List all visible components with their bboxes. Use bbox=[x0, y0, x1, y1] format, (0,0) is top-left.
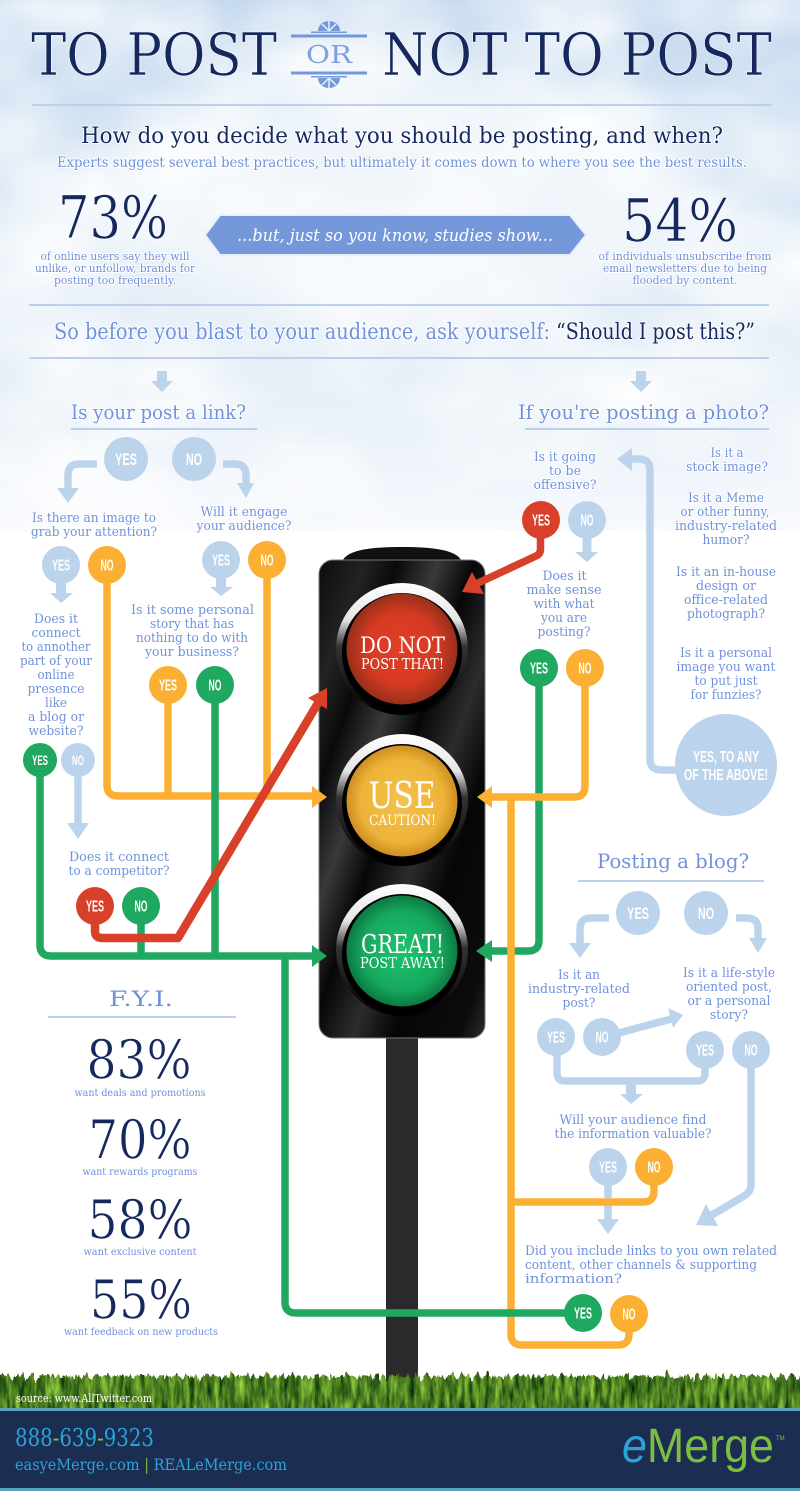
logo: eMerge: eMerge bbox=[622, 1420, 774, 1473]
question: industry bbox=[528, 968, 630, 1011]
question: connect: to annother bbox=[22, 640, 91, 655]
stat: 83%: want deals and promotions bbox=[74, 1087, 206, 1099]
traffic light bbox=[319, 547, 485, 1038]
rule bbox=[29, 357, 769, 359]
arrow: yes to links question bbox=[597, 1178, 619, 1234]
yellow connector: long run bbox=[511, 797, 654, 1345]
arrow: yes to any back to offensive bbox=[617, 448, 680, 770]
rule bbox=[32, 104, 772, 106]
green connector to great bbox=[476, 678, 539, 962]
question: competitor: to a competitor? bbox=[68, 864, 170, 879]
question: personal story: story that has bbox=[150, 617, 234, 632]
node: yes story bbox=[149, 666, 187, 704]
question: lifestyle: oriented post, bbox=[686, 980, 772, 995]
footer bbox=[0, 1408, 800, 1491]
question: connect: online bbox=[38, 668, 75, 683]
node: yes engage bbox=[202, 541, 240, 579]
question: connect: like bbox=[45, 696, 67, 711]
question: links: information? bbox=[525, 1272, 622, 1287]
prompt: should I post this: “Should I post this?” bbox=[556, 320, 755, 345]
arrow: to link branch bbox=[151, 371, 173, 392]
heading: FYI: F.Y.I. bbox=[109, 987, 173, 1011]
stat: 70%: 70% bbox=[88, 1110, 192, 1171]
list: photo questions bbox=[675, 446, 777, 703]
subheading: experts suggest: Experts suggest several best practices, but ultimately it comes down to where you see the best results. bbox=[57, 155, 747, 171]
question: connect: Does it bbox=[34, 612, 79, 627]
list: photo questions: Is it a Meme bbox=[688, 491, 764, 506]
question: connect bbox=[20, 612, 93, 739]
node: yes to any bbox=[675, 714, 777, 816]
node: no connect bbox=[61, 743, 95, 777]
node: yes offensive bbox=[522, 501, 560, 539]
list: photo questions: photograph? bbox=[687, 607, 765, 622]
node: no valuable: NO bbox=[648, 1160, 660, 1176]
question: industry: industry-related bbox=[528, 982, 630, 997]
node: yes links bbox=[564, 1294, 602, 1332]
node: yes: YES bbox=[115, 450, 137, 469]
stat: 58%: 58% bbox=[88, 1190, 192, 1251]
yellow light bbox=[336, 734, 468, 866]
red connector to do not post bbox=[95, 688, 327, 938]
arrow: no to engage question bbox=[223, 464, 254, 498]
node: yes connect: YES bbox=[32, 753, 48, 768]
OR ornament bbox=[291, 21, 367, 88]
panel: posting a photo bbox=[462, 400, 777, 962]
node: no blog bbox=[684, 891, 728, 935]
stat: 55% bbox=[64, 1270, 218, 1338]
node: yes industry: YES bbox=[547, 1030, 565, 1046]
stat: 73%: unlike, or unfollow, brands for bbox=[35, 261, 195, 275]
panel: posting a blog bbox=[285, 797, 777, 1345]
stat: 55%: 55% bbox=[90, 1270, 192, 1331]
heading: blog: Posting a blog? bbox=[597, 849, 749, 873]
question: offensive: offensive? bbox=[534, 478, 597, 493]
arrow: yes engage to story question bbox=[210, 574, 233, 596]
yellow light: USE bbox=[368, 776, 436, 817]
question: make sense bbox=[526, 569, 602, 640]
node: no story: NO bbox=[208, 678, 222, 694]
pole bbox=[386, 1030, 418, 1386]
stat: 58%: want exclusive content bbox=[84, 1246, 197, 1258]
question: make sense: Does it bbox=[542, 569, 587, 584]
arrow: no to links question bbox=[696, 1060, 751, 1226]
node: yes lifestyle bbox=[686, 1031, 724, 1069]
question: lifestyle: or a personal bbox=[688, 994, 770, 1009]
list: photo questions: to put just bbox=[694, 674, 758, 689]
question: make sense: with what bbox=[534, 597, 595, 612]
question: personal story bbox=[131, 603, 254, 660]
connector: yes both to valuable question bbox=[557, 1048, 705, 1104]
node: no industry: NO bbox=[596, 1030, 608, 1046]
stat: 70%: want rewards programs bbox=[82, 1166, 198, 1178]
stat: 54%: of individuals unsubscribe from bbox=[598, 249, 772, 263]
red light: POST THAT! bbox=[361, 655, 444, 673]
panel: FYI bbox=[48, 987, 236, 1338]
red light: DO NOT bbox=[360, 634, 445, 659]
stat: 54%: flooded by content. bbox=[632, 273, 738, 287]
stat: 54%: 54% bbox=[622, 186, 738, 255]
node: yes offensive: YES bbox=[532, 512, 550, 530]
green light bbox=[336, 884, 468, 1016]
node: no industry bbox=[583, 1018, 621, 1056]
node: no competitor: NO bbox=[134, 898, 148, 916]
title: TO POST bbox=[31, 20, 277, 89]
panel: is your post a link bbox=[20, 400, 327, 967]
question: offensive: Is it going bbox=[534, 450, 596, 465]
list: photo questions: for funzies? bbox=[690, 688, 762, 703]
question: links: content, other channels & supporting bbox=[525, 1258, 757, 1273]
list: photo questions: Is it a bbox=[710, 446, 744, 461]
node: no lifestyle bbox=[732, 1031, 770, 1069]
stat: 83%: 83% bbox=[86, 1030, 192, 1091]
arrow: to photo branch bbox=[630, 371, 652, 392]
question: make sense: posting? bbox=[538, 625, 591, 640]
arrow: no to make sense question bbox=[575, 530, 598, 562]
question: offensive bbox=[534, 450, 597, 493]
question: personal story: your business? bbox=[144, 645, 239, 660]
node: no engage bbox=[248, 541, 286, 579]
banner: studies show bbox=[205, 215, 586, 255]
question: industry: post? bbox=[562, 996, 596, 1011]
node: no lifestyle: NO bbox=[744, 1042, 758, 1060]
title bbox=[31, 20, 772, 89]
prompt: should I post this: So before you blast to your audience, ask yourself: bbox=[54, 320, 550, 345]
node: yes blog: YES bbox=[627, 904, 649, 923]
question: links: Did you include links to you own related bbox=[525, 1244, 777, 1259]
arrow: yes to image question bbox=[57, 464, 97, 503]
question: competitor: Does it connect bbox=[69, 850, 170, 865]
node: yes industry bbox=[537, 1018, 575, 1056]
node: yes lifestyle: YES bbox=[696, 1042, 714, 1060]
yellow light: CAUTION! bbox=[369, 813, 436, 829]
list: photo questions: image you want bbox=[676, 660, 776, 675]
question: engage: Will it engage bbox=[200, 505, 288, 520]
node: yes competitor: YES bbox=[86, 898, 104, 916]
rule bbox=[29, 304, 769, 306]
node: no competitor bbox=[122, 887, 160, 925]
question: connect: presence bbox=[28, 682, 85, 697]
question: engage: your audience? bbox=[196, 519, 292, 534]
node: no story bbox=[196, 666, 234, 704]
node: yes image bbox=[42, 546, 80, 584]
node: yes story: YES bbox=[159, 678, 177, 694]
question: offensive: to be bbox=[549, 464, 581, 479]
node: no: NO bbox=[186, 450, 202, 469]
sky background bbox=[0, 0, 800, 531]
source: source: www.AllTwitter.com bbox=[16, 1392, 152, 1405]
node: no bbox=[172, 437, 216, 481]
node: yes bbox=[104, 437, 148, 481]
list: photo questions: stock image? bbox=[686, 460, 768, 475]
stat: 73%: 73% bbox=[58, 183, 168, 252]
stat: 55%: want feedback on new products bbox=[64, 1326, 218, 1338]
question: links bbox=[525, 1244, 777, 1287]
phone number: 888-639-9323 bbox=[15, 1424, 154, 1452]
node: yes valuable: YES bbox=[599, 1160, 617, 1176]
stat: 54% bbox=[598, 186, 772, 287]
green connectors to great bbox=[40, 695, 327, 967]
heading: how do you decide: How do you decide what you should be posting, and when? bbox=[81, 124, 723, 149]
node: no links: NO bbox=[622, 1306, 636, 1324]
heading: link: Is your post a link? bbox=[71, 400, 246, 424]
list: photo questions: humor? bbox=[702, 533, 750, 548]
question: personal story: Is it some personal bbox=[131, 603, 254, 618]
green connector: yes links to great bbox=[285, 956, 583, 1313]
list: photo questions: office-related bbox=[684, 593, 768, 608]
question: connect: connect bbox=[32, 626, 81, 641]
question: connect: part of your bbox=[20, 654, 93, 669]
list: photo questions: Is it a personal bbox=[680, 646, 772, 661]
node: no offensive bbox=[568, 501, 606, 539]
question: valuable bbox=[554, 1113, 712, 1142]
node: yes links: YES bbox=[574, 1306, 592, 1322]
green light: POST AWAY! bbox=[360, 954, 445, 972]
stat: 73% bbox=[35, 183, 195, 287]
question: lifestyle: Is it a life-style bbox=[683, 966, 775, 981]
node: yes sense bbox=[520, 649, 558, 687]
arrow: no to lifestyle bbox=[615, 1008, 683, 1034]
question: lifestyle bbox=[683, 966, 775, 1023]
node: yes engage: YES bbox=[212, 552, 230, 570]
node: no image: NO bbox=[100, 558, 114, 574]
yellow connector to caution bbox=[477, 678, 585, 808]
node: no connect: NO bbox=[72, 753, 84, 768]
node: yes to any: YES, TO ANY bbox=[693, 749, 759, 766]
question: image: grab your attention? bbox=[31, 525, 157, 540]
question: image bbox=[31, 511, 157, 540]
list: photo questions: industry-related bbox=[675, 519, 777, 534]
question: industry: Is it an bbox=[558, 968, 601, 983]
node: no blog: NO bbox=[698, 904, 714, 923]
green light: GREAT! bbox=[361, 930, 444, 960]
question: make sense: you are bbox=[540, 611, 587, 626]
stat: 73%: posting too frequently. bbox=[54, 273, 176, 287]
heading: photo: If you're posting a photo? bbox=[518, 400, 769, 424]
node: no sense bbox=[566, 649, 604, 687]
node: yes sense: YES bbox=[530, 660, 548, 678]
red arrow to do not post bbox=[462, 530, 540, 594]
arrow: no to lifestyle question bbox=[736, 918, 767, 953]
node: yes competitor bbox=[76, 887, 114, 925]
node: yes valuable bbox=[589, 1148, 627, 1186]
question: valuable: Will your audience find bbox=[560, 1113, 706, 1128]
stat: 73%: of online users say they will bbox=[40, 249, 190, 263]
node: no engage: NO bbox=[260, 552, 274, 570]
question: connect: website? bbox=[28, 724, 84, 739]
question: lifestyle: story? bbox=[710, 1008, 748, 1023]
arrow: yes to industry question bbox=[569, 918, 609, 958]
red light bbox=[336, 583, 468, 715]
node: yes image: YES bbox=[52, 558, 70, 574]
question: image: Is there an image to bbox=[32, 511, 156, 526]
node: yes blog bbox=[616, 891, 660, 935]
yellow connectors to caution bbox=[107, 570, 327, 808]
question: valuable: the information valuable? bbox=[554, 1127, 712, 1142]
question: connect: a blog or bbox=[28, 710, 85, 725]
arrow: no to competitor question bbox=[67, 770, 89, 839]
list: photo questions: or other funny, bbox=[680, 505, 770, 520]
logo: eMerge: TM bbox=[776, 1436, 785, 1442]
node: no offensive: NO bbox=[580, 512, 594, 530]
websites: easyeMerge.com | REALeMerge.com bbox=[15, 1455, 287, 1474]
banner: studies show: ...but, just so you know, studies show... bbox=[237, 226, 553, 245]
node: no valuable bbox=[635, 1148, 673, 1186]
question: personal story: nothing to do with bbox=[136, 631, 249, 646]
node: no links bbox=[610, 1295, 648, 1333]
list: photo questions: design or bbox=[696, 579, 757, 594]
question: engage bbox=[196, 505, 292, 534]
node: no sense: NO bbox=[578, 660, 592, 678]
node: yes connect bbox=[23, 743, 57, 777]
node: no image bbox=[88, 546, 126, 584]
list: photo questions: Is it an in-house bbox=[676, 565, 776, 580]
question: competitor bbox=[68, 850, 170, 879]
question: make sense: make sense bbox=[526, 583, 602, 598]
stat: 54%: email newsletters due to being bbox=[603, 261, 768, 275]
arrow: yes to connect question bbox=[50, 578, 73, 603]
grass bbox=[0, 1376, 800, 1422]
OR ornament: OR bbox=[306, 41, 353, 69]
